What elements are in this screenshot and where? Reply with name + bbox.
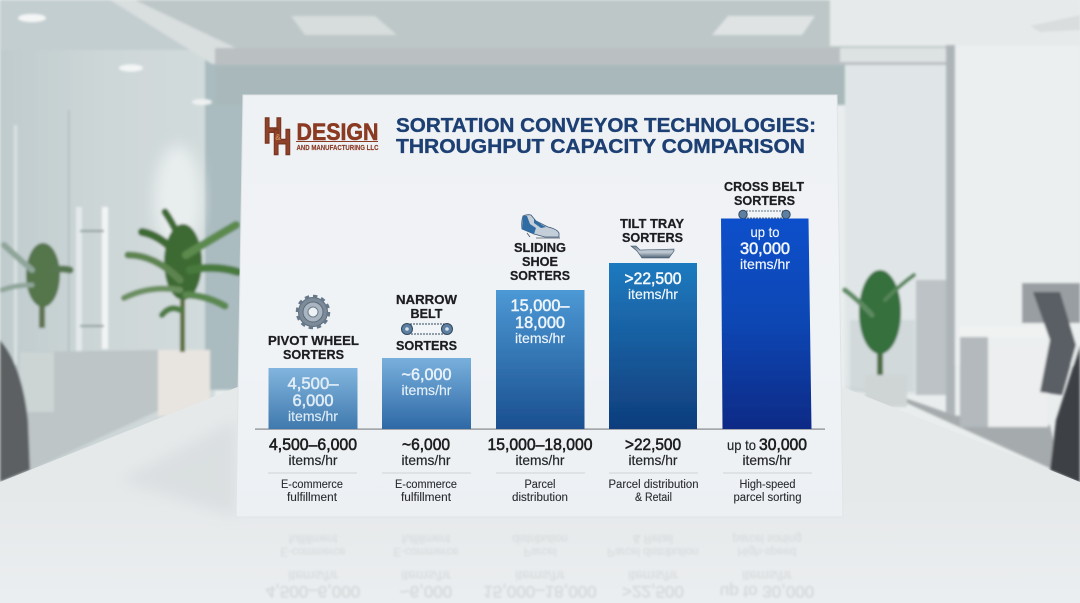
application: fulfillment [401,492,452,504]
logo: H&H Design and Manufacturing: & [275,133,281,142]
icon: gear [298,296,328,328]
label: SORTERS [510,268,570,283]
bar: items/hr [628,286,678,302]
column: pivot wheel sorters [268,296,359,504]
column: narrow belt sorters [382,292,471,504]
title: SORTATION CONVEYOR TECHNOLOGIES: [396,115,816,137]
application: High-speed [740,479,796,491]
panel: infographic board [236,95,843,517]
application [281,479,343,504]
reflection of panel text: & Retail [633,532,673,544]
reflection of panel text: items/hr [515,568,565,584]
value: 4,500–6,000 [269,435,357,454]
label [620,216,684,245]
reflection of panel text: High-speed [738,545,796,557]
bar: ~6,000 [402,365,452,384]
reflection of panel text: fulfillment [289,532,338,544]
label: SLIDING [514,240,566,255]
reflection of panel text: E-commerce [393,545,459,557]
column: cross belt sorters [721,179,812,504]
column: tilt tray sorters [608,216,698,504]
application: Parcel distribution [608,479,698,491]
reflection of panel text: items/hr [401,568,451,584]
value [269,435,357,468]
reflection of panel text: parcel sorting [732,532,802,544]
value: items/hr [288,452,338,468]
label [268,333,359,362]
logo: H&H Design and Manufacturing: H [272,122,292,162]
label: NARROW [396,292,458,307]
application [512,479,568,504]
reflection of panel text: >22,500 [622,582,684,601]
bar: items/hr [740,256,790,272]
column: sliding shoe sorters [488,215,592,504]
label: SORTERS [734,193,795,208]
application [734,479,802,504]
label: PIVOT WHEEL [268,333,359,348]
reflection of panel text: items/hr [288,568,338,584]
bar [721,218,812,429]
label [396,292,458,353]
value: >22,500 [625,435,681,454]
value: items/hr [402,452,451,468]
value: up to [727,437,756,453]
label: SORTERS [396,338,457,353]
reflection of panel text [266,532,814,601]
icon: plant small [2,243,70,328]
bar: 30,000 [740,239,790,258]
label [510,240,570,283]
value [402,435,451,468]
bar: items/hr [515,330,565,346]
title: THROUGHPUT CAPACITY COMPARISON [396,136,805,158]
bar: >22,500 [624,269,682,288]
reflection of panel text: up to 30,000 [720,582,814,601]
value: items/hr [628,452,678,468]
bar [609,263,697,429]
bar: 18,000 [515,313,565,332]
bar: items/hr [402,382,452,398]
label [724,179,804,208]
application [395,479,457,504]
reflection of panel text: Parcel distribution [607,545,699,557]
bar: up to [750,224,780,240]
reflection of panel text: items/hr [742,568,792,584]
icon: belt [402,324,452,334]
table surface [0,386,1080,603]
value [727,435,807,468]
value: 30,000 [759,435,807,454]
reflection of panel text: items/hr [628,568,678,584]
icon: shoe [522,215,560,238]
value: ~6,000 [402,435,450,454]
value: items/hr [516,452,565,468]
label: SORTERS [283,347,344,362]
logo: H&H Design and Manufacturing: H [264,110,282,151]
bar: 6,000 [292,391,334,410]
application: E-commerce [281,479,343,491]
value [488,435,592,468]
title [396,115,816,158]
icon: plant large [124,212,238,352]
reflection of panel text: 4,500–6,000 [266,582,360,601]
application: distribution [512,492,568,504]
bar: items/hr [288,408,338,424]
reflection of panel text: E-commerce [280,545,346,557]
reflection of panel text: 15,000–18,000 [483,582,597,601]
application [608,479,698,504]
logo: H&H Design and Manufacturing: DESIGN [296,119,378,146]
label: TILT TRAY [620,216,684,231]
application: fulfillment [287,492,338,504]
bar [382,358,471,429]
reflection of panel text: Parcel [524,545,556,557]
bar: 15,000– [510,296,570,315]
icon: tilt tray [631,246,674,258]
reflection of panel text: distribution [512,532,568,544]
reflection of panel text: ~6,000 [400,582,452,601]
label: SHOE [522,254,558,269]
reflection of panel text: fulfillment [402,532,451,544]
label: SORTERS [622,230,683,245]
application: parcel sorting [734,492,802,504]
logo: H&H Design and Manufacturing: AND MANUFACTURING LLC [296,143,379,152]
bar [496,290,584,429]
label: CROSS BELT [724,179,804,194]
application: Parcel [524,479,556,491]
icon: plant right [845,270,914,407]
application: & Retail [635,492,672,504]
bar: 4,500– [288,374,339,393]
value: items/hr [742,452,792,468]
label: BELT [410,306,443,321]
application: E-commerce [395,479,457,491]
icon: cross belt [739,210,790,219]
value: 15,000–18,000 [488,435,592,454]
baseline axis [255,428,825,430]
bar [268,368,358,429]
logo: H&H Design and Manufacturing [264,110,379,162]
value [625,435,681,468]
